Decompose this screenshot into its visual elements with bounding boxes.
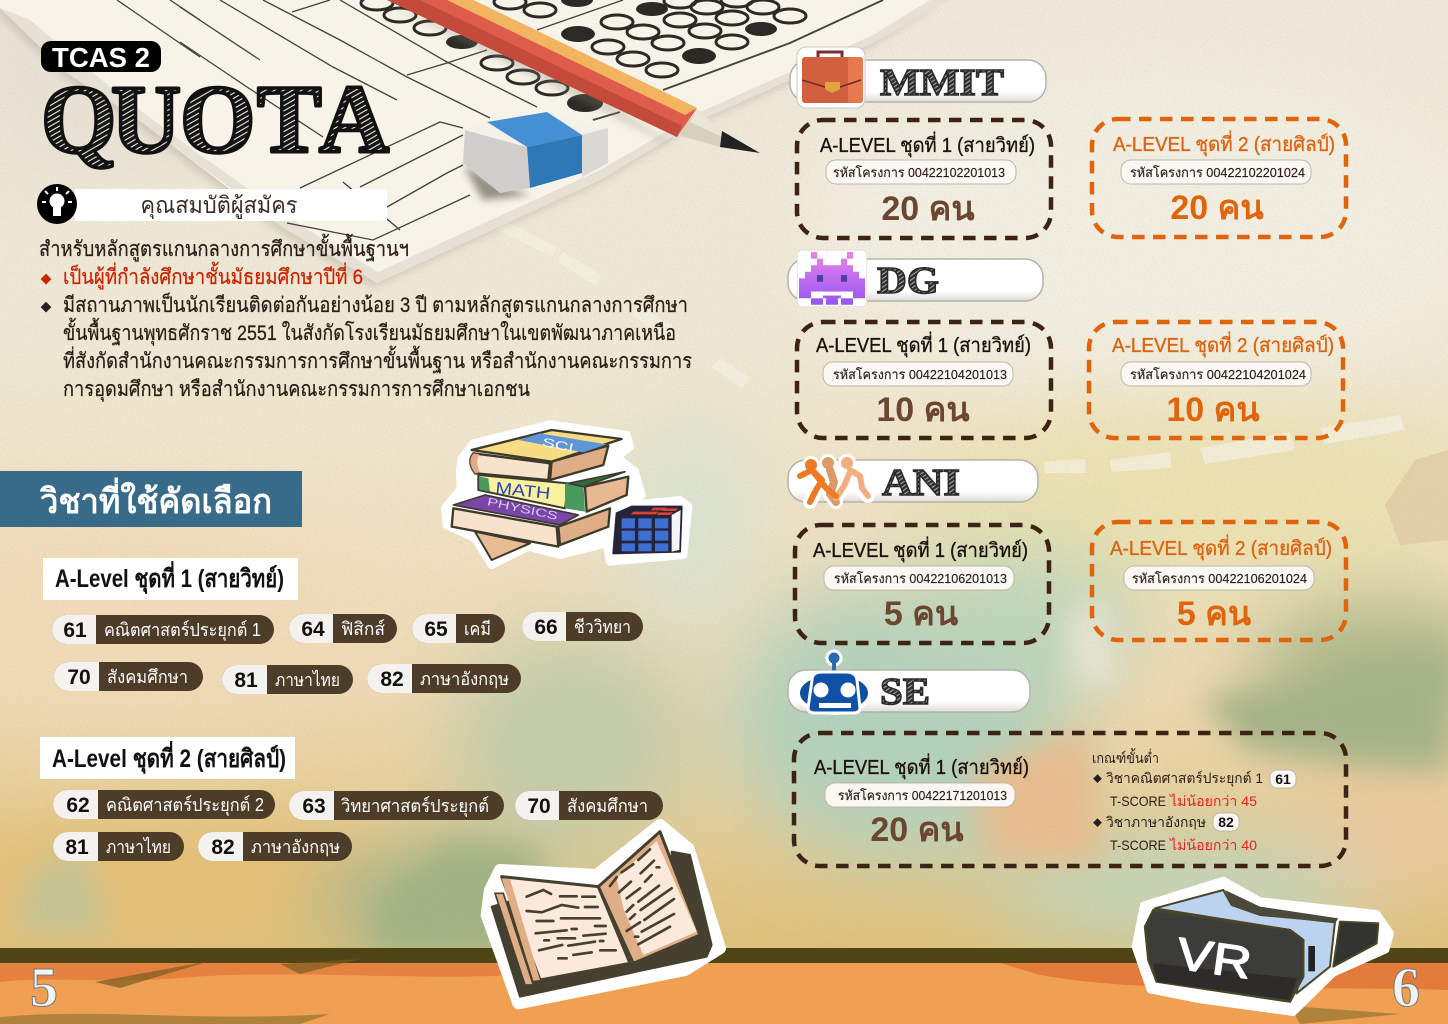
- subject pill 70: 70: [67, 666, 91, 689]
- panel: DG: [788, 250, 1343, 438]
- MMIT header bar: [790, 47, 1046, 108]
- title: QUOTA: QUOTA: [41, 66, 389, 173]
- page number 6: 6: [1392, 957, 1420, 1019]
- card: ANI set 2: รหัสโครงการ 00422106201024: [1132, 571, 1307, 586]
- heading: A-Level set 1: A-Level ชุดที่ 1 (สายวิทย์): [55, 561, 284, 595]
- card: DG set 1: รหัสโครงการ 00422104201013: [833, 367, 1007, 382]
- icon: running figures: [800, 454, 868, 502]
- SE header bar: [788, 651, 1030, 713]
- subject pill 82: ภาษาอังกฤษ: [420, 669, 509, 689]
- ANI header bar: [788, 454, 1038, 504]
- minimum criteria: [1092, 748, 1296, 853]
- card: MMIT set 1: รหัสโครงการ 00422102201013: [833, 165, 1005, 180]
- subject pill 64: 64: [301, 618, 325, 641]
- text block: qualifications: ที่สังกัดสำนักงานคณะกรรมการการศึกษาขั้นพื้นฐาน หรือสำนักงานคณะกรรมการ: [63, 346, 692, 373]
- subject pill 65: เคมี: [464, 619, 491, 639]
- card: ANI set 2: [1092, 522, 1346, 640]
- card: SE requirements: [794, 733, 1346, 866]
- subject pill 64: [289, 614, 397, 643]
- icon: robot: [798, 651, 870, 713]
- subject pill 82: ภาษาอังกฤษ: [251, 837, 340, 857]
- subject pill 70: สังคมศึกษา: [107, 667, 188, 687]
- card: MMIT set 1: A-LEVEL ชุดที่ 1 (สายวิทย์): [820, 131, 1035, 158]
- subject pill 66: 66: [534, 616, 558, 639]
- card: MMIT set 2: A-LEVEL ชุดที่ 2 (สายศิลป์): [1113, 130, 1335, 157]
- card: DG set 1: A-LEVEL ชุดที่ 1 (สายวิทย์): [816, 331, 1031, 358]
- card: SE requirements: รหัสโครงการ 00422171201013: [838, 788, 1007, 803]
- minimum criteria: ◆: [1093, 774, 1102, 784]
- panel: ANI: [788, 454, 1346, 643]
- minimum criteria: ไม่น้อยกว่า 40: [1169, 837, 1257, 853]
- SE header bar: SE: [880, 671, 930, 713]
- card: SE requirements: A-LEVEL ชุดที่ 1 (สายวิทย์): [814, 753, 1029, 780]
- subject pill 82: 82: [211, 836, 235, 859]
- card: ANI set 1: รหัสโครงการ 00422106201013: [834, 571, 1007, 586]
- illustration: stack of books and cube: PHYSICS: [486, 496, 559, 523]
- badge: TCAS 2: TCAS 2: [52, 42, 150, 73]
- heading: applicant qualifications: [37, 184, 387, 224]
- subject pill 63: [289, 791, 504, 820]
- subject pill 63: 63: [302, 795, 326, 818]
- minimum criteria: วิชาภาษาอังกฤษ: [1106, 814, 1206, 830]
- page number 5: 5: [30, 957, 58, 1019]
- illustration: open book: [487, 825, 720, 1003]
- subject pill 62: คณิตศาสตร์ประยุกต์ 2: [106, 795, 264, 816]
- panel: MMIT: [790, 47, 1346, 238]
- heading: subjects used for selection: วิชาที่ใช้คัดเลือก: [39, 477, 272, 521]
- subject pill 61: [52, 615, 274, 644]
- card: DG set 2: A-LEVEL ชุดที่ 2 (สายศิลป์): [1112, 331, 1334, 358]
- minimum criteria: วิชาคณิตศาสตร์ประยุกต์ 1: [1106, 770, 1263, 787]
- text block: qualifications: ◆: [40, 301, 52, 314]
- subject pill 82: 82: [380, 668, 404, 691]
- MMIT header bar: MMIT: [880, 62, 1004, 104]
- minimum criteria: ◆: [1093, 818, 1102, 828]
- subject pill 63: วิทยาศาสตร์ประยุกต์: [341, 796, 489, 817]
- text block: qualifications: ◆: [40, 273, 52, 286]
- card: ANI set 1: [795, 525, 1049, 643]
- icon: pixel invader: [797, 250, 867, 307]
- card: SE requirements: 20 คน: [870, 811, 964, 849]
- card: DG set 1: [797, 322, 1051, 438]
- subject pill 81: [222, 665, 353, 694]
- ANI header bar: ANI: [882, 462, 960, 504]
- illustration: stack of books and cube: MATH: [495, 478, 551, 503]
- icon: pencil: [380, 0, 760, 153]
- subject pill 82: [367, 664, 521, 693]
- card: MMIT set 2: รหัสโครงการ 00422102201024: [1130, 165, 1305, 180]
- orange ground strip: [0, 948, 1448, 1024]
- panel: SE: [788, 651, 1346, 866]
- icon: briefcase: [797, 47, 865, 108]
- card: MMIT set 1: 20 คน: [881, 190, 975, 228]
- card: DG set 2: [1089, 322, 1343, 438]
- text block: qualifications: สำหรับหลักสูตรแกนกลางการศึกษาขั้นพื้นฐานฯ: [39, 234, 409, 262]
- DG header bar: DG: [877, 260, 939, 302]
- DG header bar: [788, 250, 1043, 307]
- illustration: stack of books and cube: SCI: [541, 435, 575, 455]
- subject pill 70: [54, 662, 203, 691]
- heading: subjects used for selection: [0, 471, 302, 527]
- minimum criteria: 82: [1218, 814, 1234, 830]
- minimum criteria: T-SCORE: [1110, 837, 1166, 853]
- heading: A-Level set 1: [43, 558, 298, 600]
- subject pill 70: สังคมศึกษา: [567, 796, 648, 816]
- heading: A-Level set 2: A-Level ชุดที่ 2 (สายศิลป์): [52, 741, 286, 775]
- card: DG set 2: 10 คน: [1166, 391, 1260, 429]
- subject pill 81: ภาษาไทย: [275, 669, 340, 690]
- panel: A-Level set 1 subjects: [43, 558, 643, 694]
- subject pill 81: 81: [65, 836, 89, 859]
- subject pill 70: [515, 791, 663, 820]
- minimum criteria: ไม่น้อยกว่า 45: [1169, 793, 1257, 809]
- subject pill 65: [412, 614, 505, 643]
- panel: A-Level set 2 subjects: [40, 737, 663, 861]
- card: ANI set 2: 5 คน: [1177, 595, 1251, 633]
- subject pill 62: [53, 790, 275, 819]
- icon: eraser: [463, 112, 608, 200]
- card: ANI set 1: A-LEVEL ชุดที่ 1 (สายวิทย์): [813, 536, 1028, 563]
- text block: qualifications: ขั้นพื้นฐานพุทธศักราช 2551 ในสังกัดโรงเรียนมัธยมศึกษาในเขตพัฒนาภาคเหนือ: [63, 318, 676, 346]
- subject pill 81: [53, 832, 184, 861]
- subject pill 66: [522, 612, 643, 641]
- subject pill 61: 61: [63, 619, 87, 642]
- text block: qualifications: การอุดมศึกษา หรือสำนักงานคณะกรรมการการศึกษาเอกชน: [63, 378, 530, 402]
- subject pill 81: ภาษาไทย: [106, 836, 171, 857]
- card: MMIT set 1: [797, 120, 1051, 238]
- card: DG set 1: 10 คน: [876, 391, 970, 429]
- subject pill 64: ฟิสิกส์: [341, 619, 385, 639]
- text block: qualifications: [39, 234, 692, 402]
- icon: light bulb: [37, 184, 77, 224]
- minimum criteria: เกณฑ์ขั้นต่ำ: [1092, 748, 1159, 766]
- text block: qualifications: เป็นผู้ที่กำลังศึกษาชั้นมัธยมศึกษาปีที่ 6: [63, 262, 363, 290]
- subject pill 62: 62: [66, 794, 90, 817]
- card: MMIT set 2: 20 คน: [1170, 189, 1264, 227]
- illustration: stack of books and cube: [445, 424, 688, 565]
- minimum criteria: 61: [1275, 771, 1291, 787]
- minimum criteria: T-SCORE: [1110, 793, 1166, 809]
- card: ANI set 1: 5 คน: [884, 595, 958, 633]
- answer sheet paper with bubbles: [0, 0, 950, 288]
- subject pill 66: ชีววิทยา: [574, 617, 631, 637]
- heading: applicant qualifications: คุณสมบัติผู้สมัคร: [140, 192, 298, 219]
- subject pill 82: [198, 832, 352, 861]
- heading: A-Level set 2: [40, 737, 295, 779]
- subject pill 65: 65: [424, 618, 448, 641]
- text block: qualifications: มีสถานภาพเป็นนักเรียนติดต่อกันอย่างน้อย 3 ปี ตามหลักสูตรแกนกลางการศึกษา: [63, 291, 688, 318]
- subject pill 81: 81: [234, 669, 258, 692]
- card: DG set 2: รหัสโครงการ 00422104201024: [1130, 367, 1306, 382]
- subject pill 61: คณิตศาสตร์ประยุกต์ 1: [104, 620, 261, 641]
- illustration: VR headset: [1135, 880, 1391, 1013]
- card: ANI set 2: A-LEVEL ชุดที่ 2 (สายศิลป์): [1110, 534, 1332, 561]
- illustration: VR headset: VR: [1174, 928, 1255, 989]
- subject pill 70: 70: [527, 795, 551, 818]
- card: MMIT set 2: [1092, 119, 1346, 237]
